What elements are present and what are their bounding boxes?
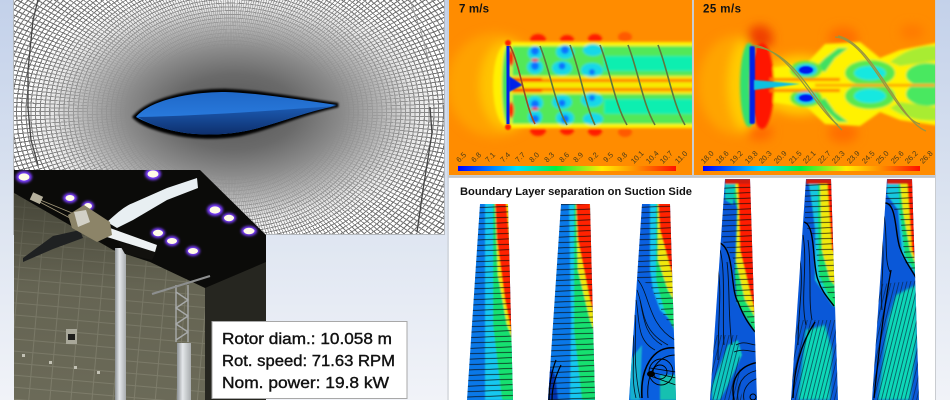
colour legend: 9.2: [586, 150, 600, 164]
colour legend: 10.7: [658, 149, 675, 166]
colour legend: 20.9: [772, 149, 789, 166]
heading: 7 m/s: 7 m/s: [459, 4, 489, 16]
colour legend: 22.1: [801, 149, 818, 166]
upstream contours: [449, 32, 523, 138]
wall plaque and markers: [22, 329, 100, 374]
colour legend: 19.8: [743, 149, 760, 166]
colour legend: 18.0: [699, 149, 716, 166]
colour legend: 6.8: [469, 150, 483, 164]
colour legend: 10.4: [644, 149, 661, 166]
tip vortex helix: [510, 45, 685, 125]
colour legend: 23.9: [845, 149, 862, 166]
colour legend: 18.6: [714, 149, 731, 166]
blade 3: [629, 204, 676, 400]
colour legend: [454, 149, 689, 171]
callout: rotor specifications: Rotor diam.: 10.058 m: [222, 331, 392, 348]
colour legend: 26.2: [903, 149, 920, 166]
panel: velocity field 25 m/s: [694, 0, 950, 175]
colour legend: 8.0: [527, 150, 541, 164]
colour legend: 7.7: [513, 150, 527, 164]
lattice tower: [152, 276, 210, 400]
blade 1: [467, 204, 513, 400]
panel: velocity field 7 m/s: [447, 0, 702, 175]
panel: airfoil mesh: [14, 0, 444, 234]
colour legend: 19.2: [728, 149, 745, 166]
colour legend: 9.8: [615, 150, 629, 164]
far-field contours: [698, 24, 924, 143]
colour legend: 7.4: [498, 150, 512, 164]
colour legend: 8.9: [571, 150, 585, 164]
colour legend: 26.8: [918, 149, 935, 166]
block wall: [14, 193, 205, 400]
colour legend: 6.5: [454, 150, 468, 164]
callout: rotor specifications: Rot. speed: 71.63 RPM: [222, 353, 395, 370]
turbine rotor and nacelle: [23, 178, 198, 262]
airfoil: [27, 0, 433, 232]
heading: 25 m/s: 25 m/s: [703, 4, 741, 16]
colour legend: 7.1: [483, 150, 497, 164]
blade 2: [548, 204, 595, 400]
panel: boundary layer separation: [448, 0, 936, 400]
heading: Boundary Layer separation on Suction Side: [460, 186, 692, 198]
callout: rotor specifications: Nom. power: 19.8 kW: [222, 375, 390, 392]
vortex cores and rotor plane: [750, 46, 813, 124]
tip vortex helix: [752, 36, 926, 131]
dark side wall: [205, 262, 266, 400]
ceiling lights: [16, 168, 257, 256]
rotor plane: [505, 40, 523, 130]
colour legend: 22.7: [816, 149, 833, 166]
blade 4: [710, 179, 757, 400]
blade 5: [791, 179, 838, 400]
photo: turbine in wind tunnel: [14, 168, 266, 400]
colour legend: 25.6: [889, 149, 906, 166]
colour legend: 8.6: [557, 150, 571, 164]
colour legend: 23.3: [830, 149, 847, 166]
callout: rotor specifications: [212, 322, 407, 398]
colour legend: 9.5: [601, 150, 615, 164]
colour legend: [699, 149, 935, 171]
colour legend: 10.1: [629, 149, 646, 166]
colour legend: 11.0: [673, 149, 689, 165]
colour legend: 24.5: [860, 149, 877, 166]
colour legend: 8.3: [542, 150, 556, 164]
flow contours: [740, 42, 950, 129]
main tower: [115, 248, 126, 400]
colour legend: 25.0: [874, 149, 891, 166]
colour legend: 21.5: [787, 149, 804, 166]
flow contours: [493, 32, 702, 137]
colour legend: 20.3: [757, 149, 774, 166]
blade 6: [872, 179, 919, 400]
